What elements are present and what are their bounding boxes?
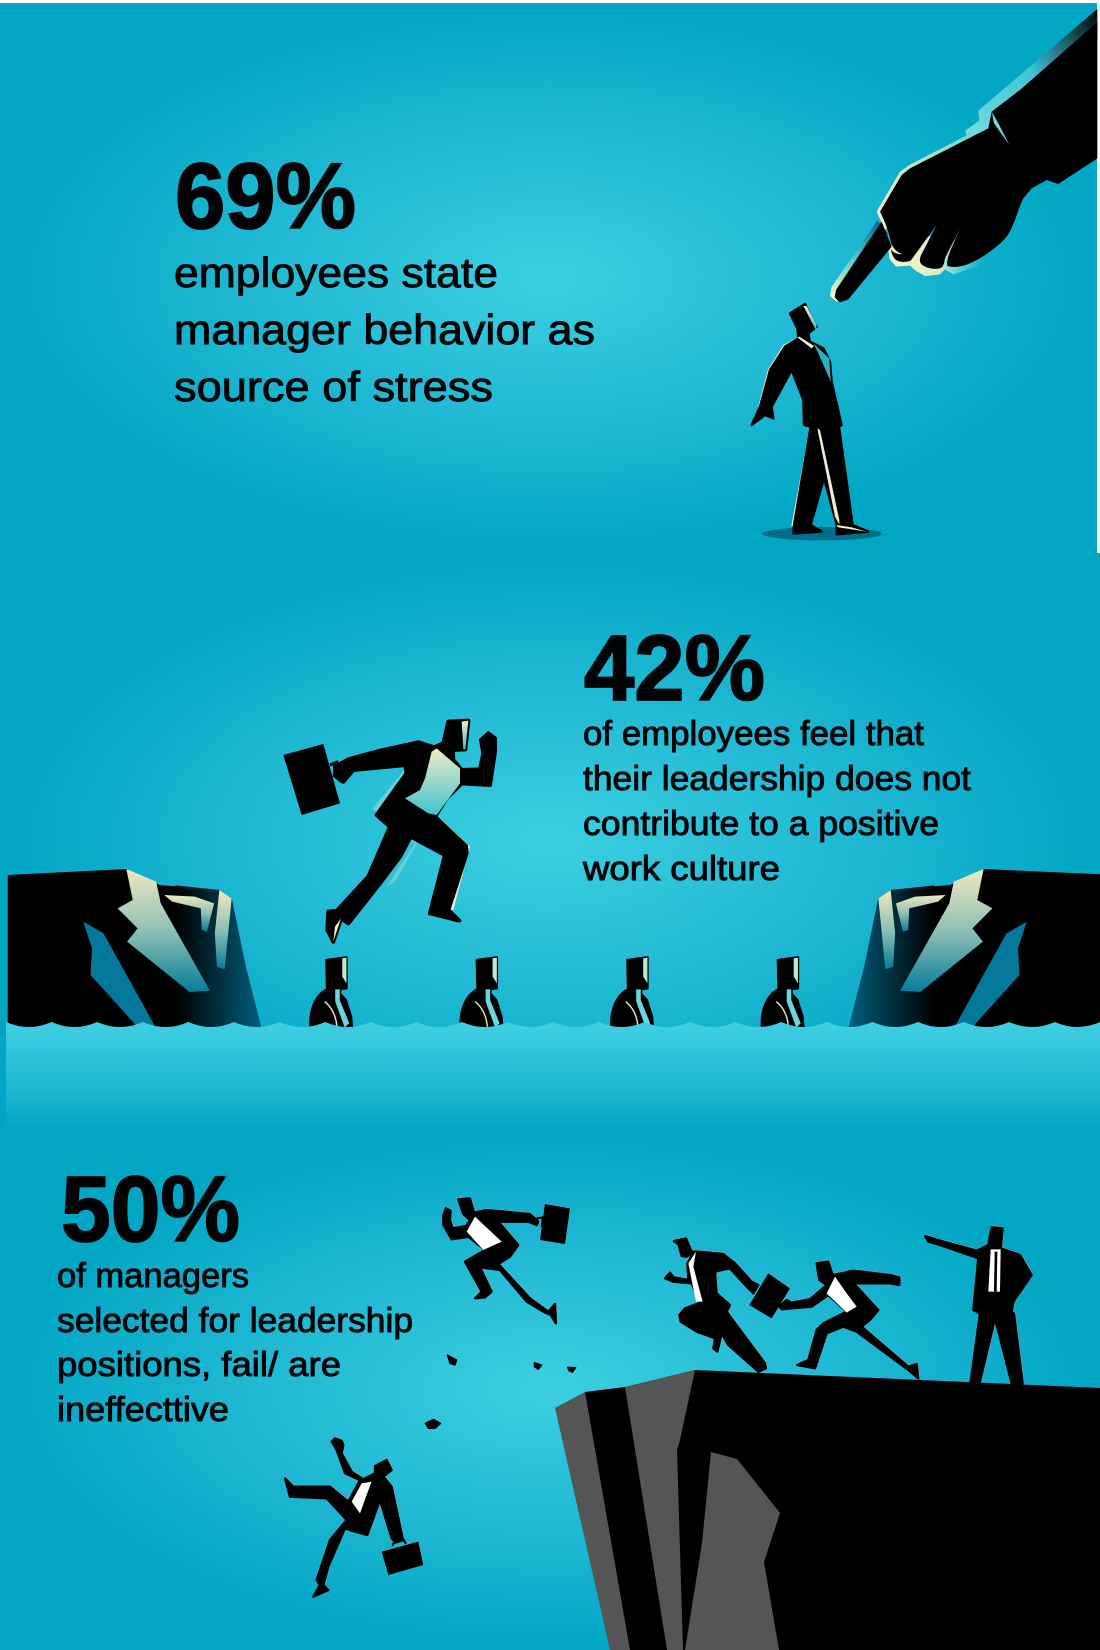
chasing man [779, 1262, 918, 1378]
text: leadership does not contribute to positive work culture: contribute to a positive [583, 805, 939, 843]
man in water 3 [611, 957, 653, 1028]
water [6, 1022, 1100, 1130]
text: managers selected for leadership fail: of managers [57, 1257, 249, 1295]
figure: falling man [285, 1438, 423, 1597]
panel: manager stress [0, 3, 1097, 553]
text: employees state manager behavior as source of stress: employees state [174, 249, 498, 296]
figure: man leaping off cliff [443, 1198, 570, 1323]
stat: 42%: 42% [584, 616, 765, 720]
falling rocks [425, 1355, 576, 1428]
figure: man jumping with briefcase [283, 721, 495, 942]
running man [665, 1238, 766, 1372]
text: managers selected for leadership fail: ineffecttive [57, 1391, 229, 1429]
text: employees state manager behavior as source of stress: manager behavior as [174, 306, 595, 353]
panel: failing managers [0, 1130, 1100, 1650]
stat: 50%: 50% [61, 1157, 240, 1261]
figures: men in water as stepping stones [310, 957, 804, 1028]
panel: leadership culture [0, 553, 1100, 1130]
text: managers selected for leadership fail [57, 1257, 413, 1429]
text: leadership does not contribute to positive work culture: work culture [582, 850, 780, 888]
figures: two men running with briefcase [665, 1238, 918, 1378]
briefcase [749, 1273, 790, 1318]
text: managers selected for leadership fail: positions, fail/ are [57, 1346, 341, 1384]
illustration: right cliff [849, 869, 1100, 1028]
text: leadership does not contribute to positive work culture [582, 715, 972, 888]
text: leadership does not contribute to positive work culture: their leadership does not [583, 760, 972, 798]
man in water 1 [310, 957, 352, 1028]
briefcase [283, 744, 340, 815]
illustration: left cliff [8, 869, 261, 1028]
man in water 2 [461, 957, 502, 1028]
figure: boss pointing [925, 1227, 1032, 1383]
illustration: cliff [555, 1370, 1100, 1650]
text: managers selected for leadership fail: selected for leadership [57, 1302, 413, 1340]
text: employees state manager behavior as source of stress [174, 249, 595, 410]
text: leadership does not contribute to positive work culture: of employees feel that [583, 715, 925, 753]
figure: man looking up [752, 304, 882, 540]
man in water 4 [762, 957, 804, 1028]
icon: giant pointing hand [830, 9, 1097, 302]
text: employees state manager behavior as source of stress: source of stress [174, 363, 493, 410]
stat: 69%: 69% [175, 144, 356, 248]
ground shadow [762, 527, 882, 540]
